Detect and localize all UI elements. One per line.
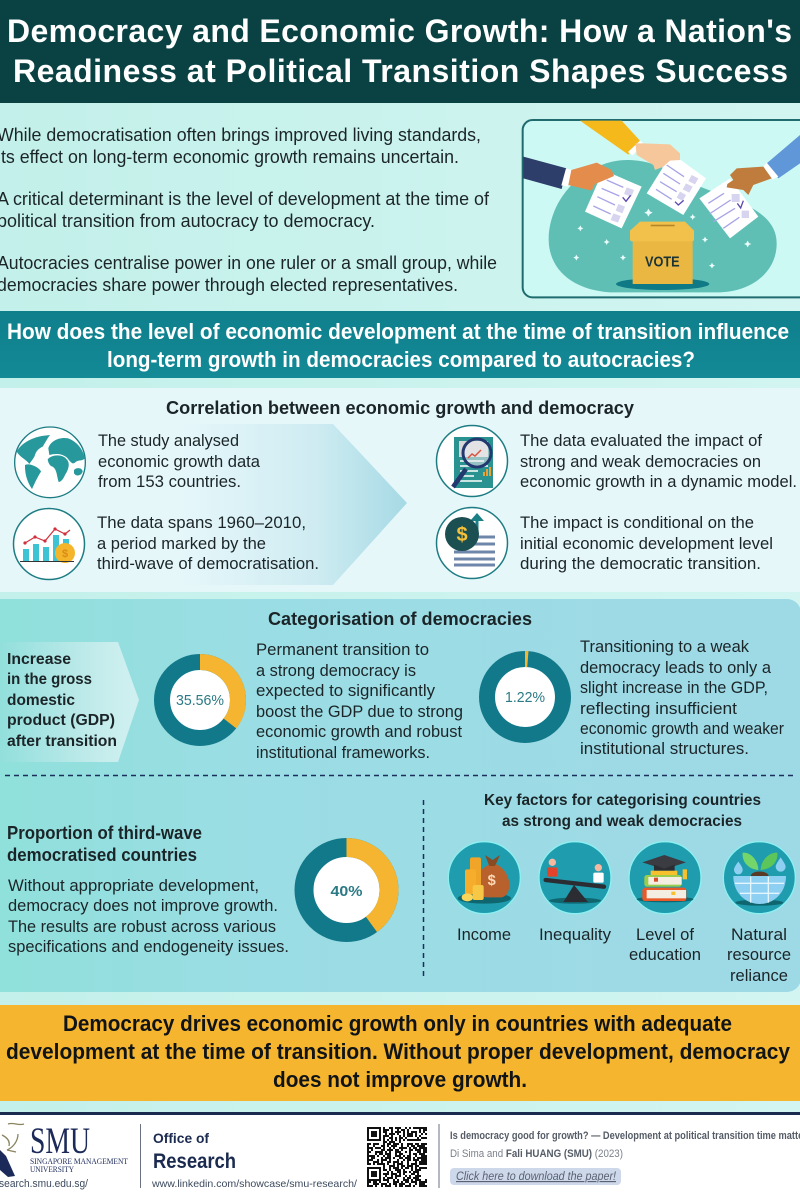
text: proportion explanation: specifications and endogeneity issues. [8,937,289,956]
icon: inequality scale [539,842,611,914]
text: conditional impact [520,513,773,573]
citation [450,1130,800,1185]
factor labels: Natural [731,925,787,944]
title banner [0,0,800,103]
icon: income money bag [448,842,520,914]
heading: proportion of countries [7,823,202,865]
text: model: The data evaluated the impact of [520,431,762,450]
factor labels: Inequality [539,925,611,944]
donut chart: 40%: 40% [330,883,362,900]
SMU logo: SMU [30,1121,90,1162]
question banner [0,311,800,378]
icon: globe [15,427,85,498]
text: weak democracy: democracy leads to only a [580,658,772,677]
QR code [367,1128,427,1186]
donut chart: 35.56%: 35.56% [176,692,224,709]
intro text block: A critical determinant is the level of development at the time of [0,189,490,209]
panel: correlation between economic growth and democracy: Correlation between economic growth and democracy [166,398,634,418]
text: strong democracy: boost the GDP due to strong [256,702,463,721]
text: proportion explanation: Without appropriate development, [8,876,259,895]
text: proportion explanation: democracy does not improve growth. [8,896,278,915]
text: weak democracy: slight increase in the GDP, [580,678,768,697]
icon: bar chart with coin [14,508,84,580]
factor labels: Level of [636,925,694,944]
text: strong democracy: institutional frameworks. [256,743,430,762]
SMU logo: UNIVERSITY [30,1165,74,1174]
office of research: Research [153,1150,236,1173]
text: data period: The data spans 1960–2010, [97,513,306,532]
text: model [520,431,797,491]
title banner: Readiness at Political Transition Shapes Success [13,53,788,89]
panel: categorisation of democracies: Categorisation of democracies [268,609,532,629]
heading: key factors: Key factors for categorising countries [484,792,761,809]
text: strong democracy: Permanent transition to [256,640,429,659]
conclusion banner: does not improve growth. [273,1067,527,1092]
arrow: GDP increase label: in the gross [7,671,92,688]
intro text block: its effect on long-term economic growth remains uncertain. [0,147,459,167]
icon: natural resources globe and plant [723,842,795,914]
text: weak democracy [580,637,784,758]
text: conditional impact: during the democratic transition. [520,554,761,573]
heading: proportion of countries: democratised countries [7,845,197,865]
heading: proportion of countries: Proportion of third-wave [7,823,202,843]
text: strong democracy: expected to significantly [256,681,435,700]
text: weak democracy: institutional structures. [580,739,749,758]
arrow: GDP increase label: domestic [7,692,75,709]
text: data period: a period marked by the [97,534,266,553]
conclusion banner: Democracy drives economic growth only in countries with adequate [63,1011,732,1036]
office of research: www.linkedin.com/showcase/smu-research/ [151,1178,357,1190]
text: study data: economic growth data [98,452,261,471]
text: study data [98,431,261,491]
title banner: Democracy and Economic Growth: How a Nation's [7,13,792,49]
citation: Di Sima and Fali HUANG (SMU) (2023) [450,1148,623,1160]
office of research [151,1130,357,1190]
icon: books and graduation cap [629,842,701,914]
factor labels [457,925,791,985]
text: model: economic growth in a dynamic model. [520,472,797,491]
text: model: strong and weak democracies on [520,452,761,471]
SMU logo: SINGAPORE MANAGEMENT [30,1157,128,1166]
arrow: GDP increase label: after transition [7,733,117,750]
text: strong democracy: a strong democracy is [256,661,416,680]
text: strong democracy [256,640,463,762]
donut chart: 1.22% [487,659,563,735]
panel: categorisation of democracies [0,599,800,992]
question banner: long-term growth in democracies compared to autocracies? [107,347,695,372]
icon: bar chart with coin: $ [62,548,68,560]
text: strong democracy: economic growth and robust [256,722,462,741]
text: weak democracy: economic growth and weaker [580,719,784,738]
icon: income money bag: $ [488,873,496,889]
text: weak democracy: reflecting insufficient [580,699,737,718]
text: proportion explanation [8,876,289,956]
heading: key factors: as strong and weak democracies [502,813,742,830]
icon: dollar and growth arrow: $ [456,524,468,546]
icon: magnifier over report [436,426,508,496]
illustration: hands voting at ballot box [523,120,800,297]
donut chart: 1.22%: 1.22% [505,689,545,706]
intro text block: political transition from autocracy to democracy. [0,211,375,231]
intro text block: democracies share power through elected representatives. [0,275,458,295]
arrow: GDP increase label: Increase [7,651,71,668]
donut chart: 35.56% [162,662,238,738]
factor labels: education [629,945,701,964]
hands holding ballots [568,143,772,195]
panel: correlation between economic growth and democracy [0,388,800,592]
factor labels: resource [727,945,791,964]
text: data period [97,513,319,573]
text: data period: third-wave of democratisation. [97,554,319,573]
text: proportion explanation: The results are robust across various [8,917,276,936]
intro text block: While democratisation often brings improved living standards, [0,125,481,145]
text: study data: from 153 countries. [98,472,241,491]
ballot papers [585,153,758,238]
text: conditional impact: initial economic development level [520,534,773,553]
citation: Click here to download the paper! [456,1171,617,1183]
intro text block: Autocracies centralise power in one ruler or a small group, while [0,253,497,273]
factor labels: Income [457,925,511,944]
text: weak democracy: Transitioning to a weak [580,637,749,656]
vote label: VOTE [645,255,680,271]
arrow: GDP increase label [0,642,139,762]
icon: dollar and growth arrow [436,508,508,578]
footer [0,1112,800,1200]
heading: key factors [484,792,761,830]
text: study data: The study analysed [98,431,239,450]
donut chart: 40% [304,848,389,932]
intro text block [0,125,497,295]
arrow: GDP increase label: product (GDP) [7,712,115,729]
conclusion banner [0,1005,800,1101]
office of research: Office of [153,1130,209,1146]
factor labels: reliance [730,966,788,985]
text: conditional impact: The impact is conditional on the [520,513,754,532]
SMU logo [0,1121,128,1190]
